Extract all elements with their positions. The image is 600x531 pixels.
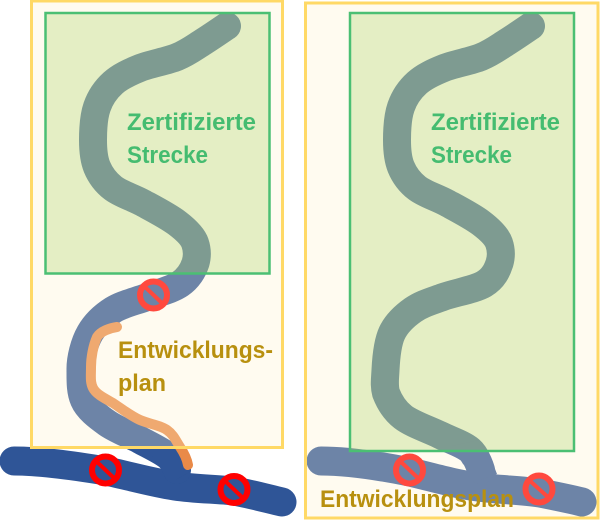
- label: development plan: Entwicklungsplan: [320, 486, 514, 513]
- panel: left scenario: [14, 1, 282, 503]
- icon: prohibition sign on main road east: [220, 476, 248, 503]
- label: certified section: Strecke: [127, 142, 208, 169]
- label: certified section: Zertifizierte: [127, 109, 256, 136]
- road: main road right: [321, 461, 582, 502]
- road: junction fill right: [452, 440, 497, 480]
- label: certified section: Strecke: [431, 142, 512, 169]
- panel: development plan area: [32, 1, 282, 448]
- label: development plan: Entwicklungs-: [118, 337, 273, 364]
- road: route left: [80, 26, 227, 470]
- panel: development plan area: [306, 3, 598, 518]
- route: orange development plan path: [91, 327, 188, 465]
- road: main road left: [14, 461, 282, 502]
- icon: prohibition sign west: [396, 456, 423, 484]
- icon: prohibition sign east: [526, 476, 552, 502]
- icon: prohibition sign on main road west: [92, 456, 119, 484]
- label: certified section: Zertifizierte: [431, 109, 560, 136]
- panel: certified section area: [350, 13, 574, 451]
- label: development plan: plan: [118, 370, 166, 397]
- panel: certified section area: [46, 13, 270, 274]
- icon: prohibition sign on route: [140, 282, 167, 308]
- panel: right scenario: [306, 3, 598, 518]
- road: junction fill left: [148, 444, 190, 480]
- road: route right: [385, 26, 531, 470]
